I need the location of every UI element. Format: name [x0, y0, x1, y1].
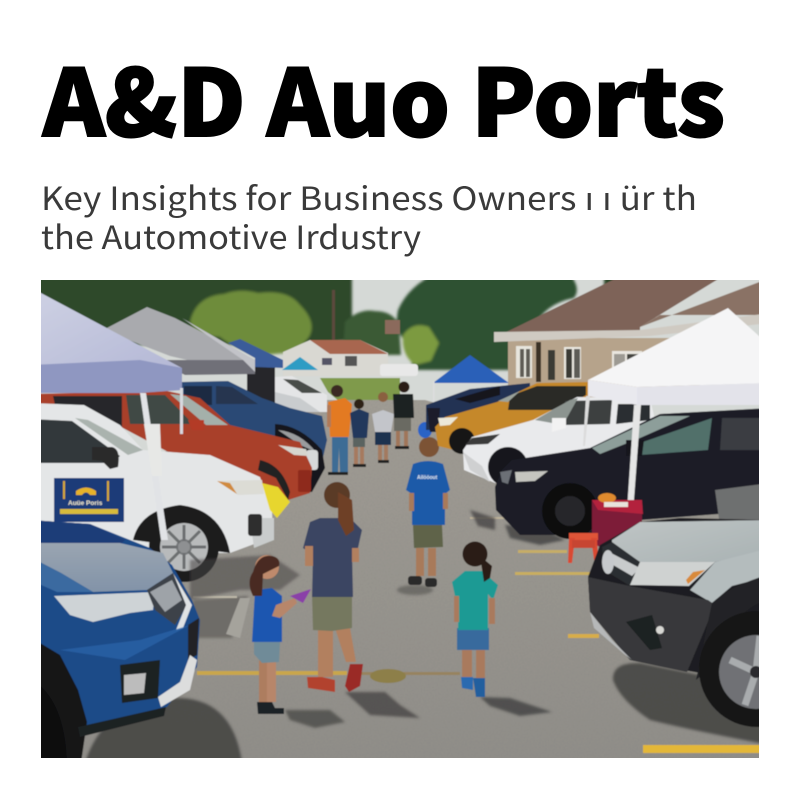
man in black shirt [393, 382, 414, 449]
subtitle: Key Insights for Business Owners ı ı ür th [41, 174, 697, 220]
big lavender tent [30, 287, 183, 540]
blue tent center [434, 354, 509, 384]
child in blue shirt and camo shorts [406, 437, 450, 587]
dry leaves patch [370, 669, 406, 683]
subtitle: the Automotive Irdustry [41, 213, 421, 259]
infographic canvas [40, 66, 759, 758]
small house [282, 319, 401, 367]
dark banner [247, 366, 275, 404]
boy in navy shirt [350, 399, 369, 467]
child in blue shirt and camo shorts: Ailööout [417, 475, 438, 481]
truck bed [714, 484, 759, 520]
tan house [493, 280, 759, 398]
dark car behind red suv [275, 424, 325, 492]
red suv [30, 391, 312, 500]
background trees [41, 280, 614, 372]
white suv center right [463, 397, 655, 487]
grass [320, 378, 400, 402]
far white cars [275, 364, 418, 412]
parking lot patch [190, 596, 248, 638]
white tent [583, 308, 770, 540]
logo sign on car door: Auüe Poris [68, 500, 103, 507]
gray tent [103, 307, 255, 375]
white suv [30, 403, 274, 582]
small girl with paper [250, 555, 311, 714]
asphalt ground [80, 399, 759, 758]
man in orange shirt [327, 385, 352, 475]
yellow flag [262, 483, 290, 518]
blue tent [228, 339, 283, 368]
sky [41, 280, 759, 452]
girl in teal shirt [452, 542, 498, 697]
dark navy suvs [426, 383, 530, 432]
event photo scene [41, 280, 759, 758]
black suv [495, 408, 770, 539]
parking lines [193, 517, 773, 753]
silver car foreground [588, 518, 800, 727]
older girl in navy tee [303, 482, 363, 692]
asphalt speckle [20, 400, 780, 780]
teal tent [282, 357, 318, 370]
orange stool [568, 533, 598, 563]
logo sign on car door [54, 478, 124, 522]
shadows on ground [83, 510, 770, 770]
utility pole [332, 290, 335, 350]
person in white shirt [372, 392, 394, 463]
title: A&D Auo Ports [42, 30, 725, 163]
balloon [418, 422, 432, 438]
subtitle [41, 174, 697, 259]
blue suv [182, 381, 327, 462]
red table with orange items [592, 493, 643, 553]
orange suv [435, 382, 588, 454]
blue car foreground [30, 520, 200, 770]
